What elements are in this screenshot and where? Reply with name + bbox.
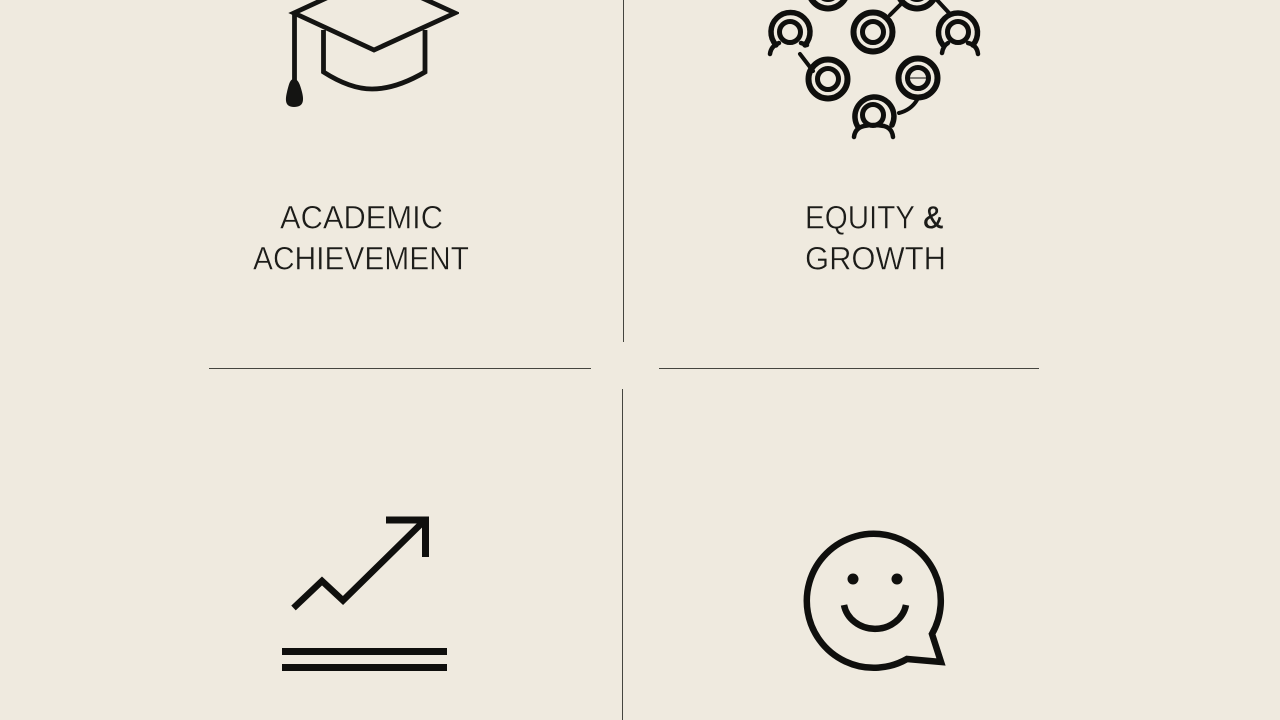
panel: equity and growth [768, 0, 980, 276]
ring node top right [898, 0, 936, 8]
base lines [282, 652, 447, 668]
ring node centre [854, 12, 892, 52]
heading: equity and growth: EQUITY & [805, 200, 944, 236]
ring node top left [808, 0, 848, 8]
trend line [294, 520, 425, 608]
ring node lower right [898, 58, 938, 98]
icon: connected people network [768, 0, 980, 140]
connector lines [800, 0, 950, 113]
arrow head [386, 520, 426, 557]
icon: graduation cap [286, 0, 459, 107]
heading: academic achievement: ACADEMIC [280, 200, 443, 236]
panel: academic achievement [253, 0, 469, 276]
ring node lower left [808, 60, 848, 98]
person node left [770, 12, 810, 54]
heading: equity and growth: GROWTH [805, 240, 946, 276]
heading: equity and growth [805, 200, 946, 276]
heading: academic achievement [253, 200, 469, 276]
icon: smiling speech bubble [804, 530, 946, 671]
person node right [938, 13, 978, 54]
panel: growth trend [282, 516, 447, 671]
person node bottom [854, 97, 894, 137]
icon: rising trend arrow over double line [282, 516, 447, 671]
panel: wellbeing [804, 530, 946, 671]
